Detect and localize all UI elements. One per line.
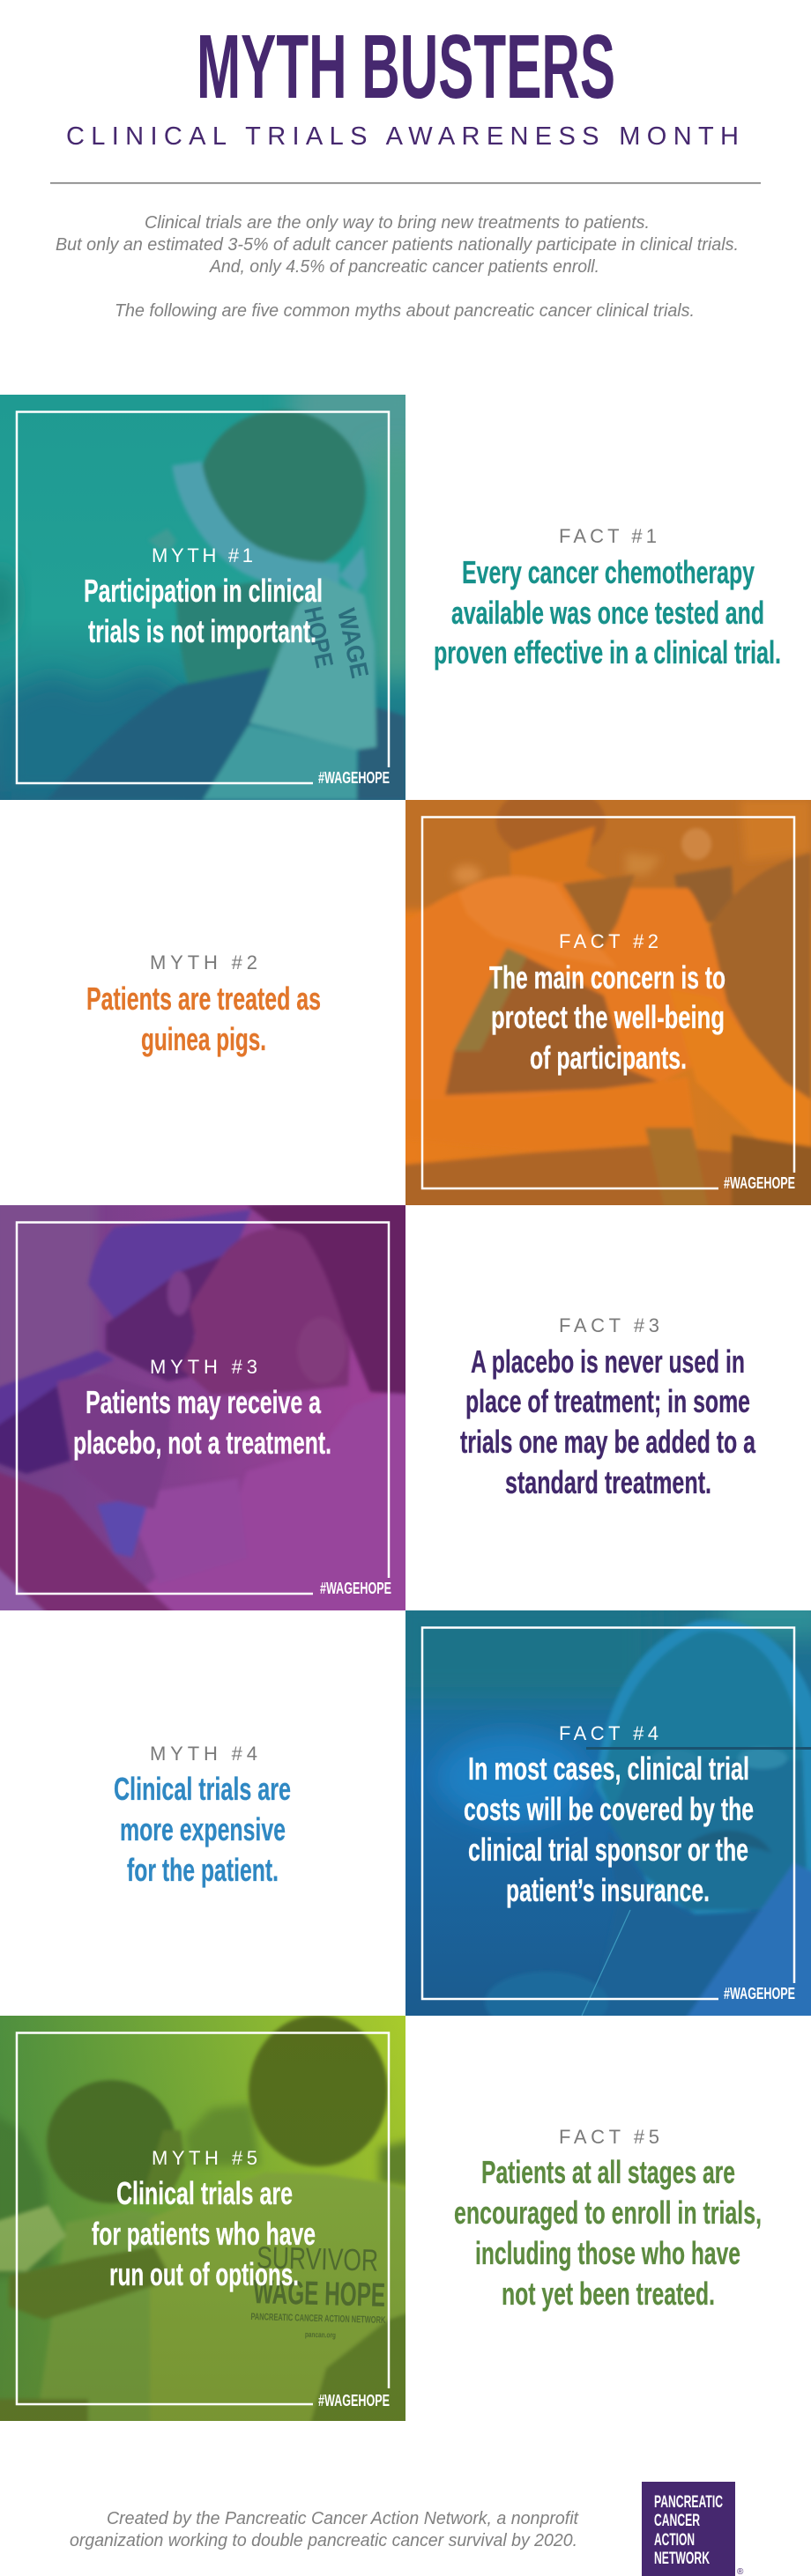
myth statement: guinea pigs. [141, 1021, 266, 1057]
subtitle: CLINICAL TRIALS AWARENESS MONTH [66, 122, 739, 151]
fact label: FACT #1 [559, 525, 657, 547]
myth statement: for the patient. [127, 1852, 279, 1888]
panel: myth 2 [86, 951, 321, 1057]
myth statement: placebo, not a treatment. [73, 1425, 331, 1461]
photo: runner with headband [0, 395, 406, 800]
fact statement: protect the well-being [491, 999, 725, 1035]
photo: two women hugging [0, 1205, 406, 1610]
logo: Pancreatic Cancer Action Network: CANCER [654, 2512, 700, 2530]
fact label: FACT #5 [559, 2126, 659, 2148]
fact statement [434, 554, 781, 670]
footer credit text: organization working to double pancreatic cancer survival by 2020. [70, 2531, 577, 2550]
myth label: MYTH #2 [150, 951, 257, 973]
footer credit text [70, 2509, 579, 2550]
photo: runner with headband: #WAGEHOPE [318, 769, 390, 787]
myth statement [114, 1771, 291, 1888]
photo: two survivors from behind: SURVIVOR [257, 2240, 379, 2278]
panel: fact 4 [388, 1593, 811, 2033]
photo: runner with headband: WAGE [332, 606, 374, 680]
fact statement: patient’s insurance. [506, 1872, 710, 1908]
fact label: FACT #3 [559, 1314, 659, 1336]
logo: Pancreatic Cancer Action Network [642, 2482, 744, 2576]
footer credit text: Created by the Pancreatic Cancer Action Network, a nonprofit [107, 2509, 579, 2528]
myth statement: trials is not important. [88, 613, 316, 649]
myth statement: Patients may receive a [86, 1384, 322, 1420]
myth label: MYTH #5 [152, 2147, 257, 2169]
fact label: FACT #4 [559, 1722, 658, 1744]
fact label: FACT #2 [559, 930, 658, 952]
myth statement: run out of options. [109, 2256, 299, 2292]
myth statement: for patients who have [92, 2216, 316, 2252]
panel: myth 3 [0, 1196, 414, 1619]
myth statement [92, 2175, 316, 2292]
intro text: But only an estimated 3-5% of adult cancer patients nationally participate in clinical trials. [56, 235, 739, 255]
panel: myth 1 [0, 377, 423, 800]
fact statement [460, 1344, 756, 1500]
intro text: Clinical trials are the only way to bring new treatments to patients. [145, 213, 650, 233]
photo: embracing runners [406, 800, 811, 1205]
myth statement [84, 573, 323, 649]
logo: Pancreatic Cancer Action Network: PANCREATIC [654, 2493, 723, 2512]
myth label: MYTH #1 [152, 544, 253, 566]
fact statement [489, 959, 725, 1076]
panel: fact 1 [434, 525, 781, 670]
photo: smiling man with glasses [406, 1610, 811, 2016]
myth statement: Patients are treated as [86, 981, 321, 1017]
photo: two survivors from behind: pancan.org [305, 2330, 336, 2340]
myth statement [86, 981, 321, 1057]
myth statement: more expensive [120, 1811, 286, 1847]
panel: myth 4 [114, 1743, 291, 1888]
panel: fact 5 [454, 2126, 762, 2312]
intro text [56, 213, 739, 321]
fact statement: of participants. [530, 1040, 687, 1076]
intro text: The following are five common myths about pancreatic cancer clinical trials. [115, 301, 695, 321]
fact statement: not yet been treated. [502, 2276, 715, 2312]
photo: two survivors from behind [0, 2016, 406, 2421]
myth statement [73, 1384, 331, 1461]
panel: myth 5 [0, 2015, 414, 2430]
logo: Pancreatic Cancer Action Network: NETWORK [654, 2550, 710, 2568]
myth statement: Participation in clinical [84, 573, 323, 609]
fact statement: standard treatment. [505, 1464, 711, 1500]
fact statement [454, 2154, 762, 2312]
myth label: MYTH #4 [150, 1743, 257, 1765]
intro text: And, only 4.5% of pancreatic cancer patients enroll. [209, 257, 599, 277]
logo: Pancreatic Cancer Action Network: ACTION [654, 2531, 695, 2550]
fact statement [464, 1751, 754, 1908]
myth statement: Clinical trials are [116, 2175, 293, 2211]
panel: fact 2 [388, 782, 811, 1214]
myth label: MYTH #3 [150, 1356, 257, 1378]
photo: runner with headband: HOPE [299, 604, 339, 670]
myth statement: Clinical trials are [114, 1771, 291, 1807]
panel: fact 3 [460, 1314, 756, 1500]
